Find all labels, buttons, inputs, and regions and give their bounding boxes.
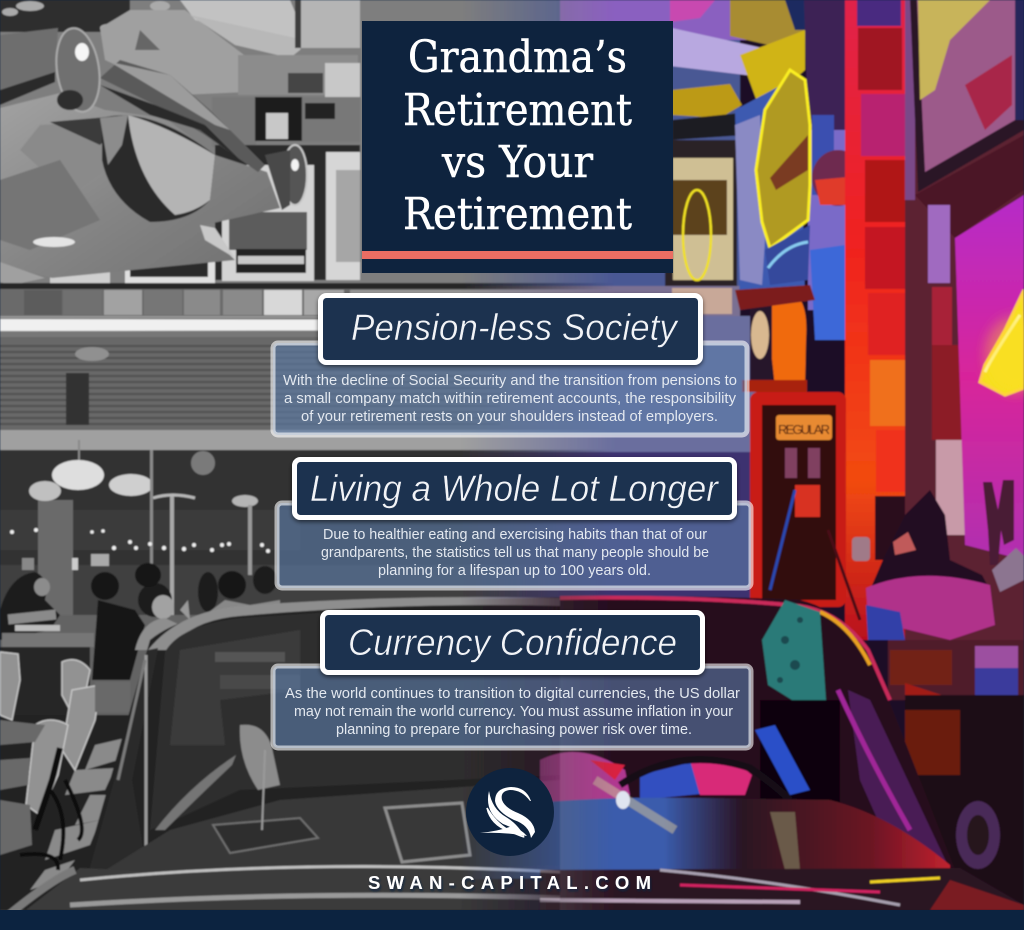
gas pump [750, 392, 846, 607]
text card [277, 503, 751, 588]
red poster column [845, 0, 907, 640]
shell neon sign [756, 70, 810, 248]
top centre posters [472, 0, 742, 287]
body text: planning for a lifespan up to 100 years old. [378, 562, 651, 579]
heading: Pension-less Society [351, 307, 679, 348]
hood trim [540, 868, 1024, 910]
text card [273, 343, 747, 435]
body text [285, 685, 740, 738]
icon: swan capital logo [466, 768, 554, 856]
title text [403, 32, 632, 240]
hood [430, 798, 950, 880]
tin sign row [0, 283, 700, 289]
dining room [0, 450, 700, 615]
heading: Currency Confidence [348, 622, 677, 663]
car roof and windows [0, 598, 560, 930]
heading box [320, 296, 700, 362]
title text: Grandma’s [408, 32, 627, 83]
body text: of your retirement rests on your shoulders instead of employers. [301, 408, 718, 425]
title panel [362, 21, 673, 273]
shelf and lower right [888, 640, 1024, 700]
panel: pension-less society [273, 296, 747, 435]
microphones [852, 537, 870, 561]
flare [595, 780, 675, 830]
body text: grandparents, the statistics tell us that many people should be [321, 544, 709, 561]
right wall [904, 129, 1024, 641]
panel: living a whole lot longer [277, 460, 751, 588]
neon colour half of the photo [470, 0, 1024, 910]
heading box [294, 460, 734, 518]
ceiling [0, 0, 700, 290]
footer bar [0, 910, 1024, 930]
car underside [0, 93, 280, 278]
body text: may not remain the world currency. You must assume inflation in your [294, 703, 733, 720]
diners [0, 572, 60, 640]
neon car cabin [474, 596, 954, 868]
heading box [322, 612, 702, 672]
letter M [983, 480, 1014, 565]
body text: With the decline of Social Security and the transition from pensions to [283, 372, 737, 389]
helmet [811, 149, 846, 207]
website address: SWAN-CAPITAL.COM [368, 872, 651, 893]
floor and chairs [0, 715, 180, 930]
body text: Due to healthier eating and exercising habits than that of our [323, 526, 707, 543]
title accent bar [362, 251, 673, 259]
body text [283, 372, 737, 425]
heading: Living a Whole Lot Longer [310, 468, 720, 509]
body text: planning to prepare for purchasing power risk over time. [336, 721, 692, 738]
neon colour half of the photo: REGULAR [778, 422, 830, 437]
poster: asphalt jungle [222, 165, 314, 281]
body text: a small company match within retirement accounts, the responsibility [284, 390, 736, 407]
title text: vs Your [441, 137, 594, 188]
blinds [0, 337, 700, 432]
interior and steering wheel [539, 751, 631, 802]
body text: As the world continues to transition to digital currencies, the US dollar [285, 685, 740, 702]
batman [870, 490, 990, 590]
wall behind shell sign [735, 75, 805, 310]
title text: Retirement [403, 85, 632, 136]
panel: currency confidence [273, 612, 751, 748]
title text: Retirement [403, 189, 632, 240]
text card [273, 666, 751, 748]
yellow neon glow [985, 317, 1024, 393]
body text [321, 526, 709, 579]
